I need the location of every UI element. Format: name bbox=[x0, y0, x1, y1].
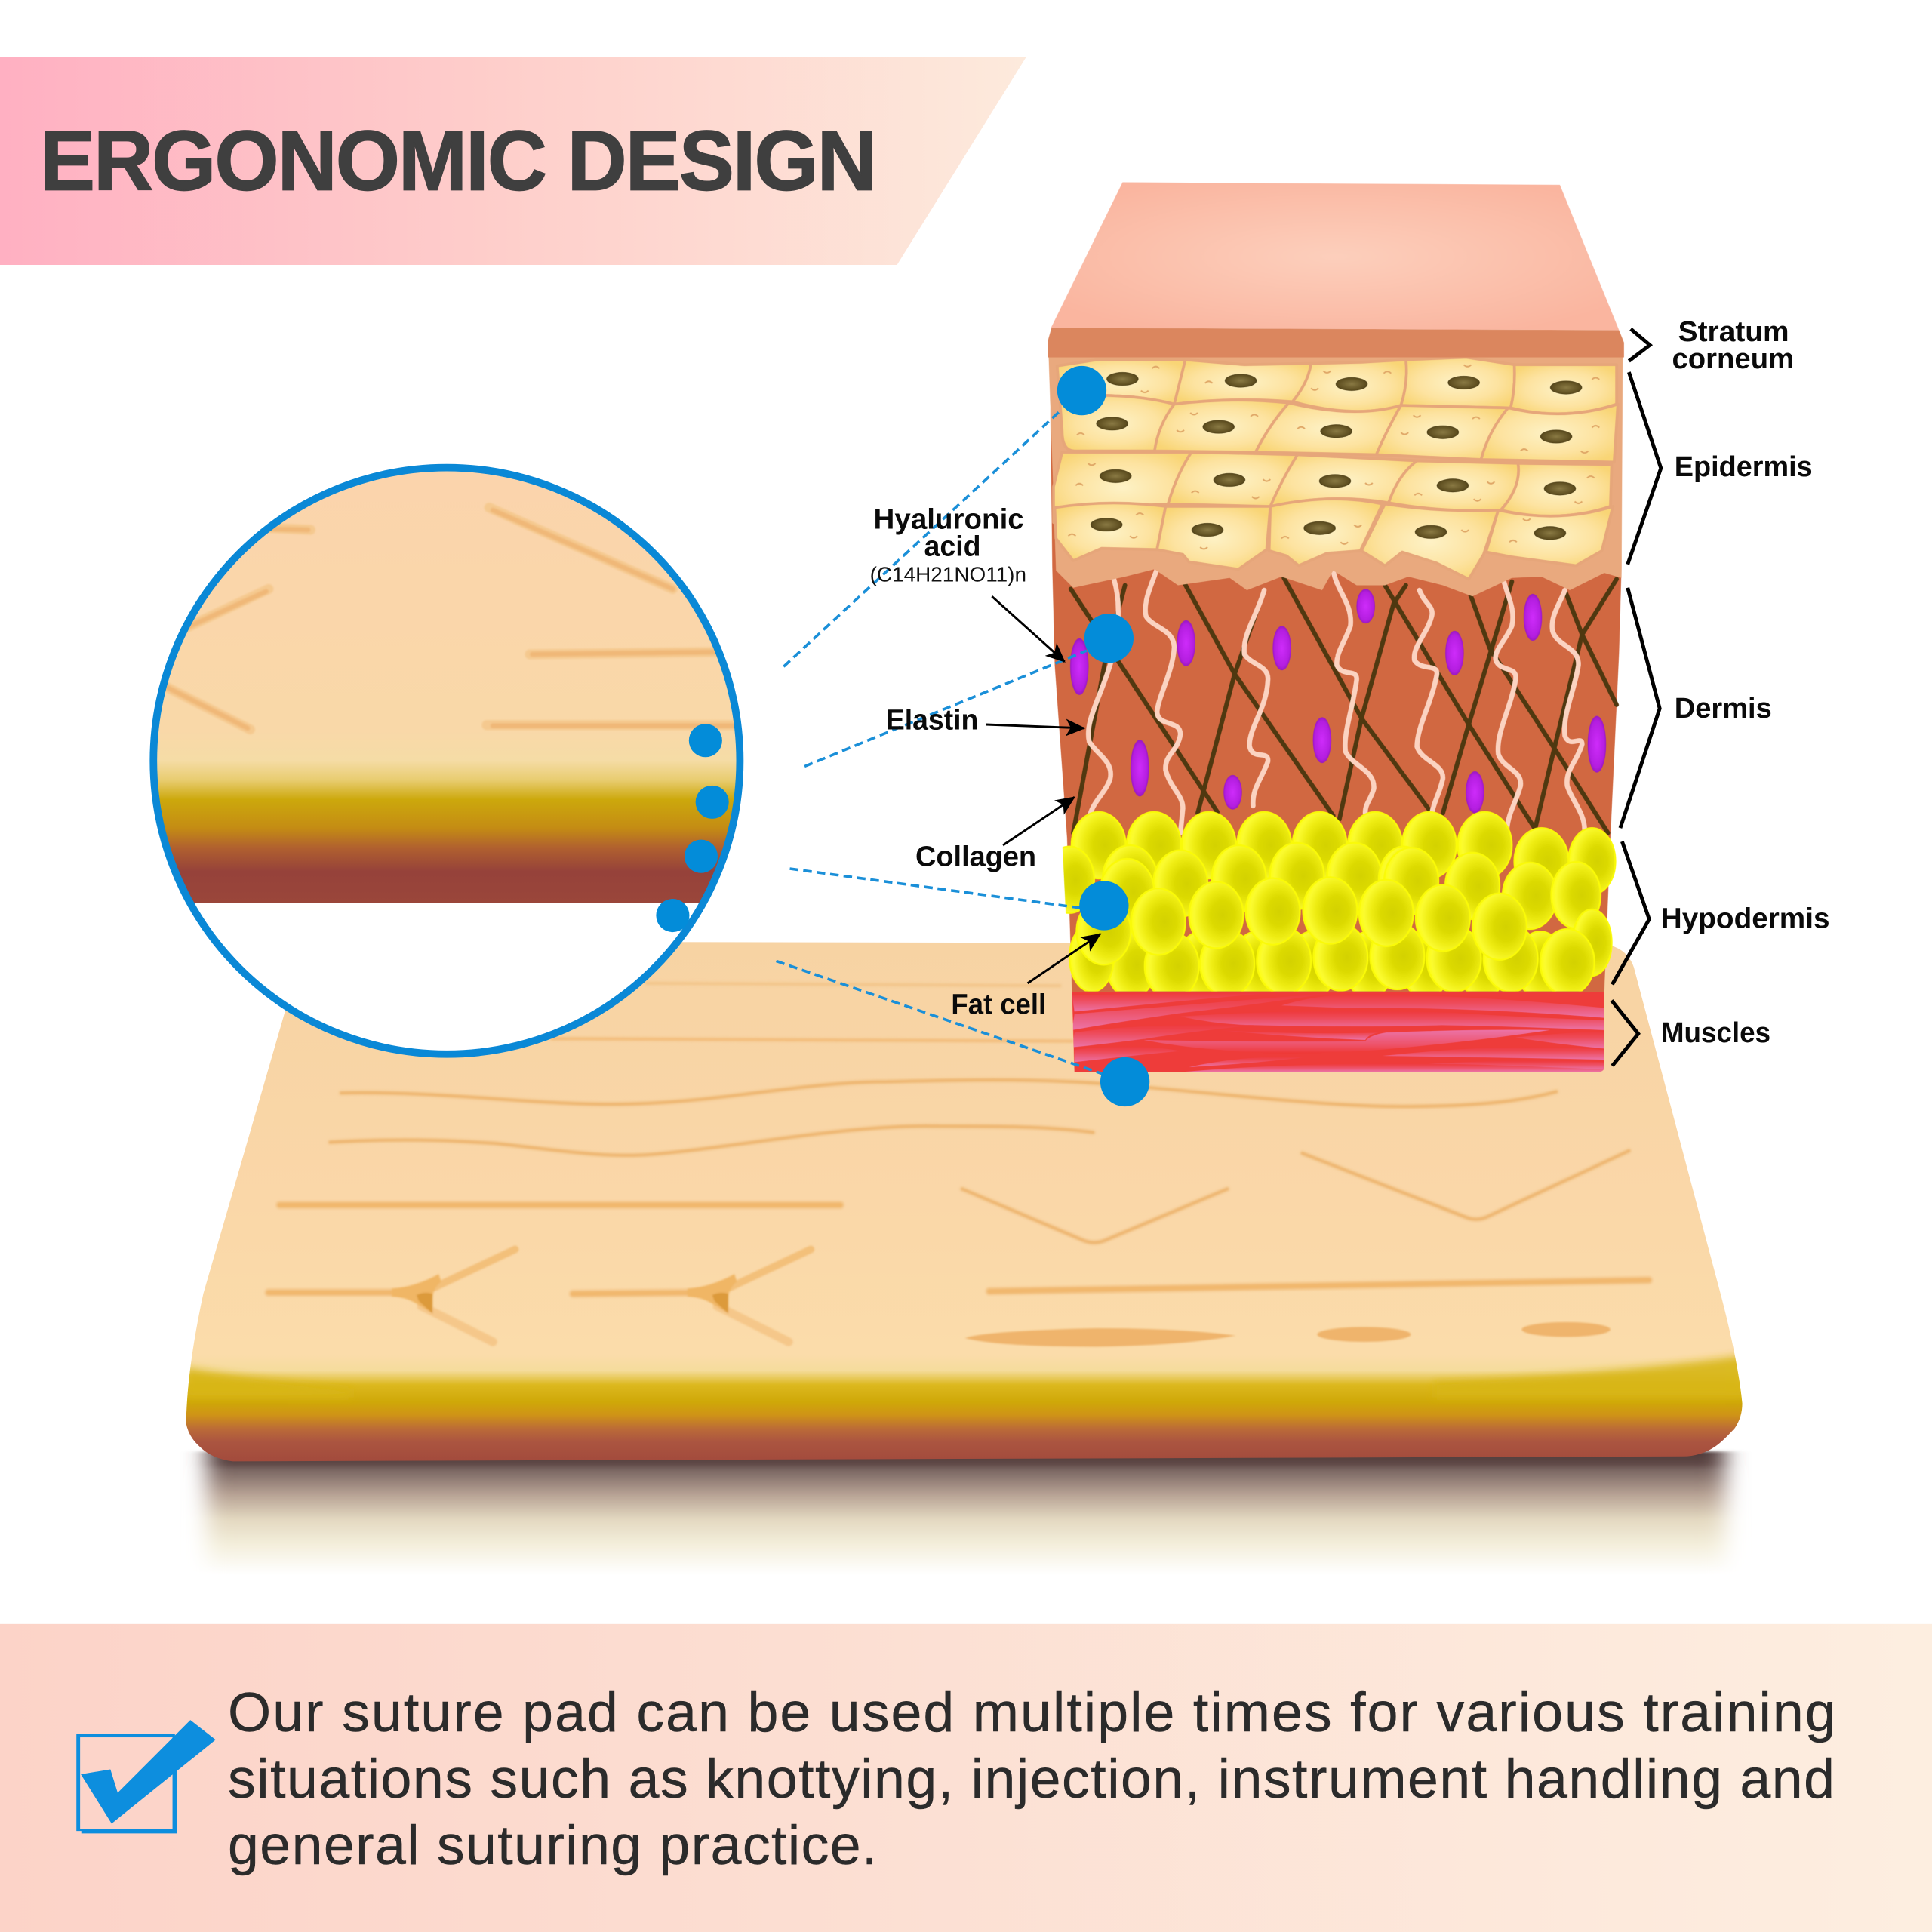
dashed connector lines bbox=[777, 409, 1104, 1075]
epidermis base bbox=[1048, 355, 1623, 596]
central fibre bbox=[1143, 1029, 1550, 1054]
icon: check box bbox=[76, 1720, 216, 1833]
title: ERGONOMIC DESIGN bbox=[40, 113, 877, 208]
pad incisions bbox=[269, 983, 1648, 1294]
left side labels: Elastin bbox=[886, 704, 978, 736]
title banner bbox=[0, 57, 1026, 265]
left side labels: Hyaluronic bbox=[874, 503, 1024, 534]
right side labels: Epidermis bbox=[1675, 451, 1813, 482]
left side labels: acid bbox=[924, 530, 981, 561]
skin cross-section diagram bbox=[1044, 183, 1624, 1072]
magnifier lens bbox=[148, 462, 746, 1054]
description text: situations such as knottying, injection, instrument handling and bbox=[228, 1747, 1835, 1810]
suture pad bbox=[185, 941, 1745, 1461]
left side labels: (C14H21NO11)n bbox=[870, 563, 1026, 586]
right side labels: corneum bbox=[1672, 343, 1794, 374]
blue marker dots on diagram bbox=[1057, 366, 1149, 1106]
epidermis cells bbox=[1054, 357, 1618, 579]
stratum corneum band bbox=[1048, 328, 1624, 357]
dermis block bbox=[1050, 357, 1622, 992]
brackets bbox=[1612, 329, 1661, 1066]
left side labels: Fat cell bbox=[951, 989, 1046, 1020]
collagen fibres bbox=[1071, 578, 1617, 833]
right side labels: Stratum bbox=[1678, 315, 1789, 347]
left side labels: Collagen bbox=[915, 841, 1036, 872]
description text: general suturing practice. bbox=[228, 1814, 877, 1876]
pad corner edges bbox=[185, 1355, 1745, 1397]
bottom band bbox=[0, 1624, 1932, 1932]
right side labels bbox=[1661, 315, 1829, 1048]
fat cells bbox=[1044, 812, 1615, 999]
cell nuclei bbox=[1091, 372, 1582, 540]
right side labels: Hypodermis bbox=[1661, 902, 1829, 934]
lens marker dots bbox=[656, 724, 729, 932]
right side labels: Muscles bbox=[1661, 1017, 1770, 1048]
pad holes bbox=[964, 1322, 1611, 1346]
elastin fibres bbox=[1088, 569, 1585, 833]
purple cells bbox=[1070, 589, 1606, 814]
description text: Our suture pad can be used multiple times for various training bbox=[228, 1681, 1836, 1743]
right side labels: Dermis bbox=[1675, 692, 1772, 724]
left side labels bbox=[870, 503, 1046, 1020]
top face bbox=[1051, 183, 1619, 331]
cell details bbox=[1069, 365, 1599, 549]
description text bbox=[228, 1681, 1836, 1876]
label arrows bbox=[986, 596, 1100, 983]
Y incisions bbox=[392, 1250, 811, 1342]
pad shadow bbox=[207, 1451, 1725, 1575]
muscle layer bbox=[1072, 992, 1604, 1072]
